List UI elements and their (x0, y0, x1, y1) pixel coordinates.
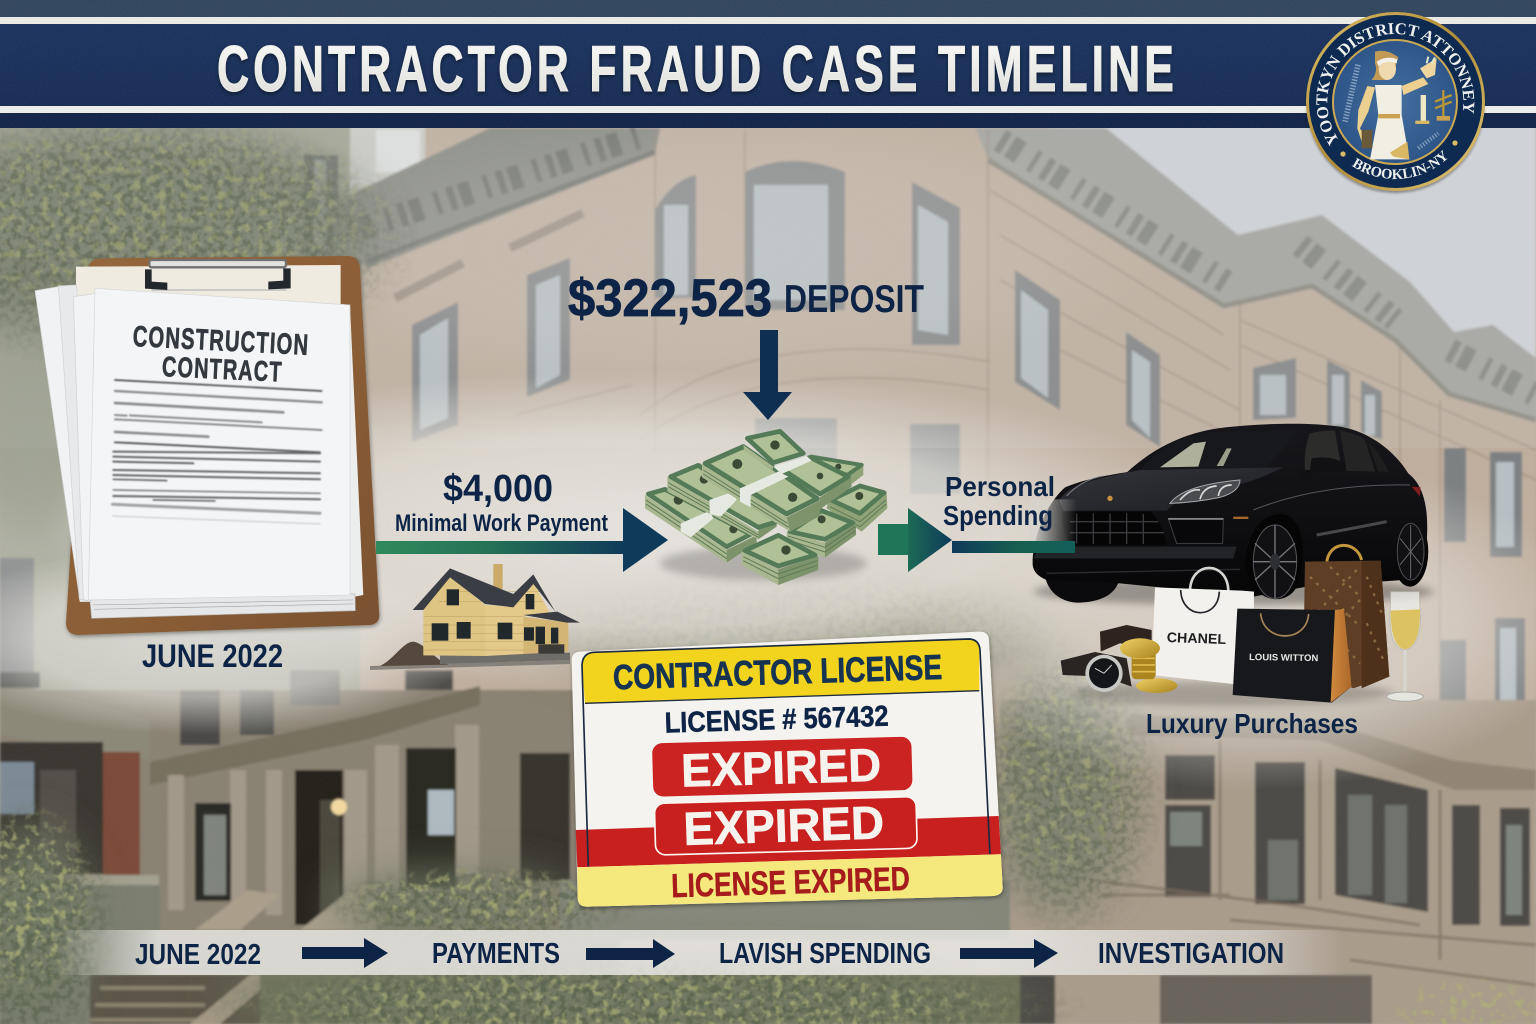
gold coins (1120, 638, 1177, 693)
step 4: INVESTIGATION (1098, 938, 1284, 970)
mid-tone behind card (560, 880, 1010, 940)
lower-left storey (0, 690, 620, 1024)
expired badge 2: EXPIRED (683, 796, 885, 855)
payment text (395, 468, 608, 537)
main top bundle (702, 447, 821, 532)
far front wheel (1045, 577, 1120, 603)
black Louis Vuitton bag (1233, 608, 1352, 703)
white Chanel bag: CHANEL (1167, 629, 1227, 647)
rear wheel rim (1397, 523, 1424, 580)
license number: LICENSE # 567432 (664, 701, 889, 740)
black Louis Vuitton bag: LOUIS WITTON (1249, 652, 1319, 663)
right cornice (975, 128, 1536, 418)
lintels (395, 213, 583, 298)
body highlights (1253, 485, 1410, 510)
arrow 3 (960, 939, 1058, 968)
bottom timeline strip (55, 930, 1345, 975)
arrow shaft into car (952, 541, 1075, 553)
arrow 1 (302, 938, 388, 968)
card frame (582, 639, 990, 867)
mirror (1297, 457, 1345, 484)
spending label (943, 471, 1055, 531)
icon: Lady Justice figure (1345, 51, 1452, 159)
stoop and steps (90, 890, 378, 1024)
top small bundle (743, 431, 803, 470)
arrow 2 (586, 939, 675, 968)
luxury goods group (1061, 545, 1423, 705)
header banner (0, 0, 1536, 128)
seal arc text: YOOTKYN DISTRICT ATTONNEY (1316, 23, 1474, 146)
lower left bundle (645, 489, 757, 563)
windshield (1141, 427, 1303, 469)
date label: June 2022: JUNE 2022 (142, 638, 283, 674)
left bay window (0, 742, 160, 1024)
haze (40, 370, 1240, 690)
panel: construction contract on clipboard (35, 256, 379, 635)
side windows (1305, 430, 1342, 470)
champagne glass (1387, 592, 1423, 701)
upper wash (0, 128, 1536, 448)
deposit amount: $322,523 (568, 269, 772, 328)
bumper (1033, 547, 1237, 558)
hood (1059, 467, 1283, 511)
back right bundle (808, 457, 863, 487)
left fade of the car (1030, 499, 1077, 548)
pale yellow footer (577, 854, 1003, 907)
middle left bundle (667, 465, 777, 539)
expired badge 1: EXPIRED (680, 739, 882, 797)
sky (975, 120, 1536, 360)
arrow: cash to spending (878, 508, 952, 572)
headlight (1170, 480, 1240, 503)
contract heading line 2: CONTRACT (161, 351, 283, 389)
rear wheel (1392, 517, 1428, 587)
seal location text: BROOKLIN-NY (1352, 150, 1448, 180)
label: Luxury Purchases: Luxury Purchases (1146, 708, 1358, 739)
upper-left cornice (328, 128, 660, 268)
arrow: deposit down (743, 330, 792, 420)
yellow header (582, 639, 979, 703)
grille (1062, 512, 1166, 545)
center right bundle (773, 456, 852, 509)
right middle bundle (787, 511, 856, 557)
header text: CONTRACTOR LICENSE (612, 648, 943, 697)
icon: cash pile (645, 431, 887, 585)
panel: contractor license card (572, 632, 1003, 907)
contract body lines (113, 380, 322, 524)
far right bundle (827, 483, 887, 532)
footer text: LICENSE EXPIRED (671, 861, 910, 905)
deposit heading (568, 269, 924, 328)
brown monogram bag (1303, 545, 1389, 688)
white Chanel bag (1152, 568, 1254, 684)
step 1: JUNE 2022 (135, 939, 261, 971)
contract heading line 1: CONSTRUCTION (132, 320, 310, 362)
icon: house under construction (370, 564, 580, 670)
back sheets (35, 285, 363, 618)
clip (145, 260, 291, 290)
wall courses (515, 130, 1536, 720)
left neighbour haze (0, 120, 360, 720)
step 3: LAVISH SPENDING (719, 938, 931, 970)
car body (1033, 424, 1427, 597)
arrow: contract to cash (376, 508, 668, 572)
right lower storey (1000, 700, 1536, 1024)
front wheel (1245, 514, 1303, 599)
line 1: Personal (945, 471, 1055, 502)
step 2: PAYMENTS (432, 938, 560, 970)
amount: $4,000 (443, 468, 553, 510)
line 2: Spending (943, 500, 1053, 531)
wristwatch (1061, 652, 1132, 692)
caption: Minimal Work Payment (395, 510, 608, 537)
cream backing paper (76, 265, 341, 307)
icon: black luxury SUV (1030, 424, 1433, 605)
seal: Brooklyn District Attorney (1305, 12, 1486, 194)
upper windows: frames and light glass (0, 161, 1525, 732)
red stripe (576, 816, 1001, 867)
watch box (1100, 625, 1152, 652)
deposit word: DEPOSIT (784, 278, 924, 321)
clipboard board (66, 256, 379, 635)
entry window and door (195, 748, 570, 925)
card base (572, 632, 1003, 907)
bottom front bundle (742, 535, 818, 585)
front sheet (88, 288, 350, 600)
